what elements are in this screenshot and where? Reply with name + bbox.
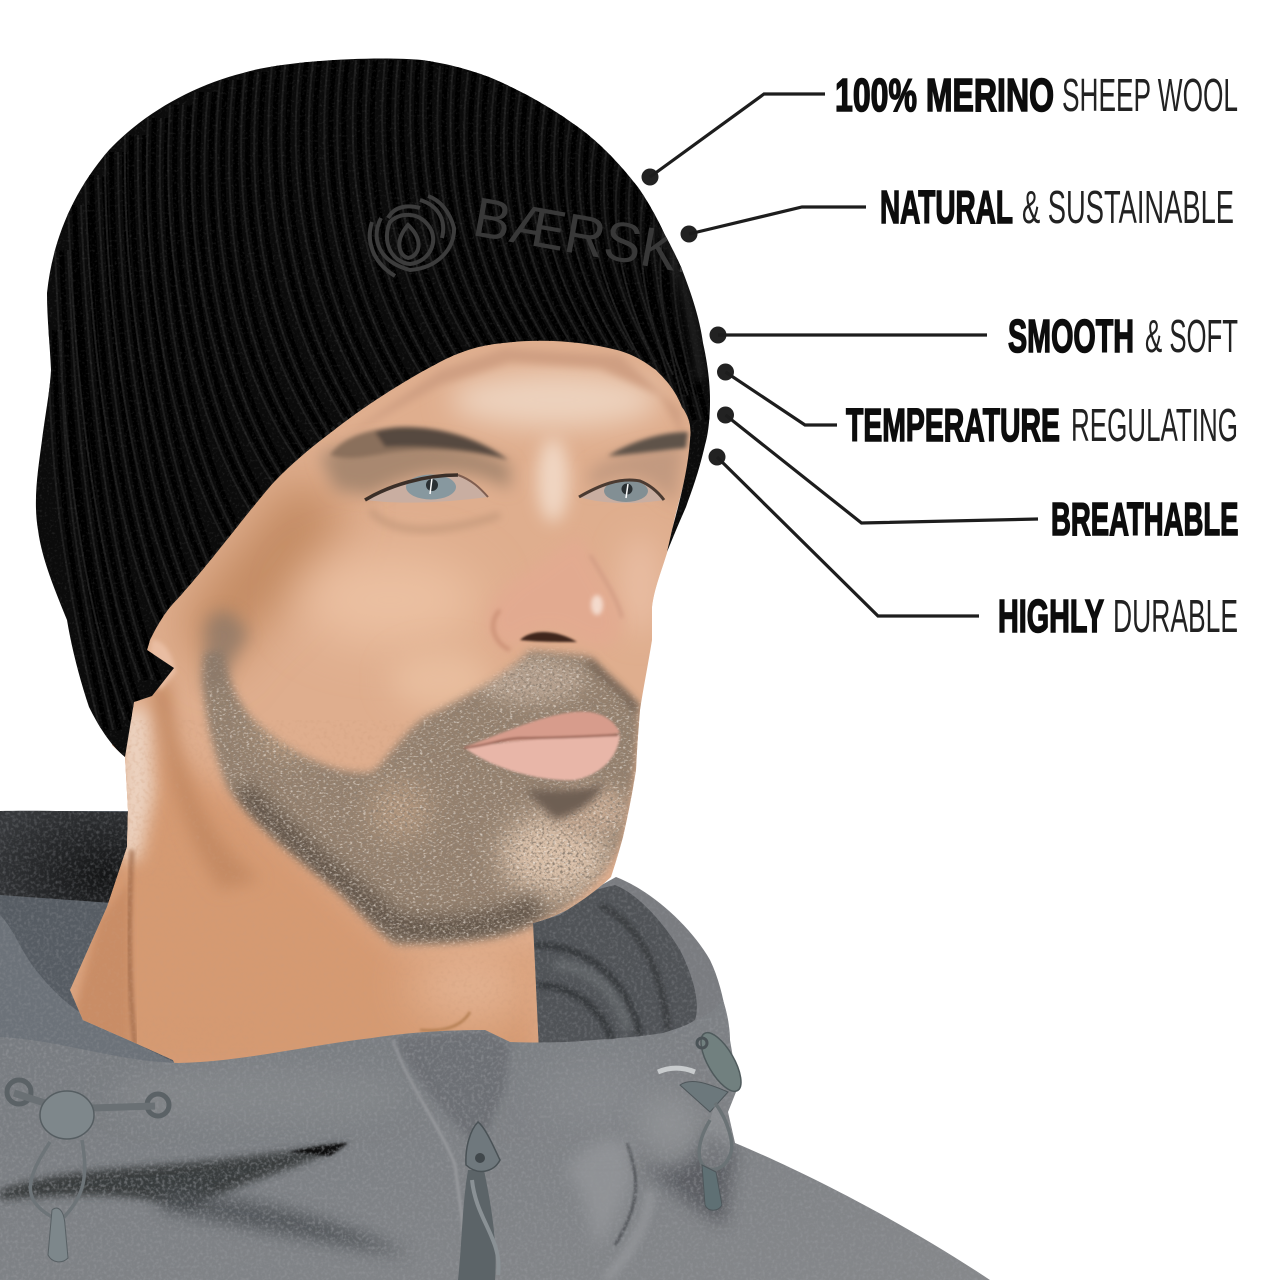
lips xyxy=(464,712,620,780)
grey fuzz near right edge xyxy=(660,225,700,380)
callout: temperature regulating: TEMPERATURE xyxy=(846,399,1060,451)
logo wordmark: BÆRSKI xyxy=(469,185,698,285)
callout: breathable xyxy=(717,406,1238,545)
under-jaw light xyxy=(410,949,530,1021)
upper forehead shadow under beanie xyxy=(384,348,681,426)
cheek highlight xyxy=(300,555,480,645)
neck skin texture xyxy=(125,720,154,981)
left eyebrow xyxy=(330,427,508,460)
sideburn xyxy=(205,611,248,690)
logo rose emblem xyxy=(370,196,454,276)
cuff bottom rim xyxy=(165,344,688,615)
callout: temperature regulating xyxy=(717,364,1238,451)
jaw shadow xyxy=(150,680,260,890)
nose xyxy=(490,556,624,652)
neck crease xyxy=(129,850,135,1045)
dark jaw band xyxy=(240,790,540,929)
hoodie front with collar xyxy=(0,1000,1000,1280)
callout: highly durable xyxy=(708,448,1238,642)
left eye xyxy=(365,474,488,503)
right eyebrow xyxy=(608,432,688,456)
zipper placket xyxy=(395,1030,510,1150)
eye bag xyxy=(370,510,500,529)
upper lip light stubble xyxy=(475,656,585,704)
nose bridge highlight xyxy=(537,438,569,522)
forehead highlight xyxy=(450,372,660,428)
right eye socket shadow xyxy=(588,449,687,500)
soul patch xyxy=(525,782,606,820)
fold shadows xyxy=(0,1142,350,1210)
left cord toggle xyxy=(7,1080,169,1262)
hoodie hood behind the neck xyxy=(0,811,740,1076)
highlights xyxy=(110,1065,410,1125)
callout: smooth and soft xyxy=(710,310,1238,362)
collar seam xyxy=(393,1040,470,1280)
head and neck skin xyxy=(70,340,690,1063)
left eye socket shadow xyxy=(320,439,510,495)
callout: highly durable: HIGHLY xyxy=(998,590,1104,642)
beanie logo xyxy=(370,185,698,285)
temple shading xyxy=(180,480,345,680)
mustache dark edge xyxy=(589,660,636,710)
light chin xyxy=(500,813,610,897)
right cheek xyxy=(618,535,662,635)
callout: natural and sustainable xyxy=(680,181,1234,242)
ear lobe xyxy=(148,640,176,690)
knit ribs xyxy=(48,60,708,730)
beard base xyxy=(198,646,642,950)
callout: natural and sustainable: NATURAL xyxy=(880,181,1013,233)
right folds xyxy=(565,1137,632,1250)
neck back highlight xyxy=(118,710,155,860)
zipper xyxy=(458,1122,500,1280)
beanie xyxy=(30,50,720,770)
photo: man wearing beanie and fleece hoodie xyxy=(0,50,1000,1280)
callout: 100% merino sheep wool: 100% MERINO xyxy=(835,69,1054,121)
right cord toggle xyxy=(658,1027,749,1210)
callout: 100% merino sheep wool xyxy=(642,69,1238,186)
right eye xyxy=(579,480,664,503)
callout: smooth and soft: SMOOTH xyxy=(1008,310,1134,362)
neck tone xyxy=(70,744,538,1063)
lower left neck tone xyxy=(76,890,128,1040)
